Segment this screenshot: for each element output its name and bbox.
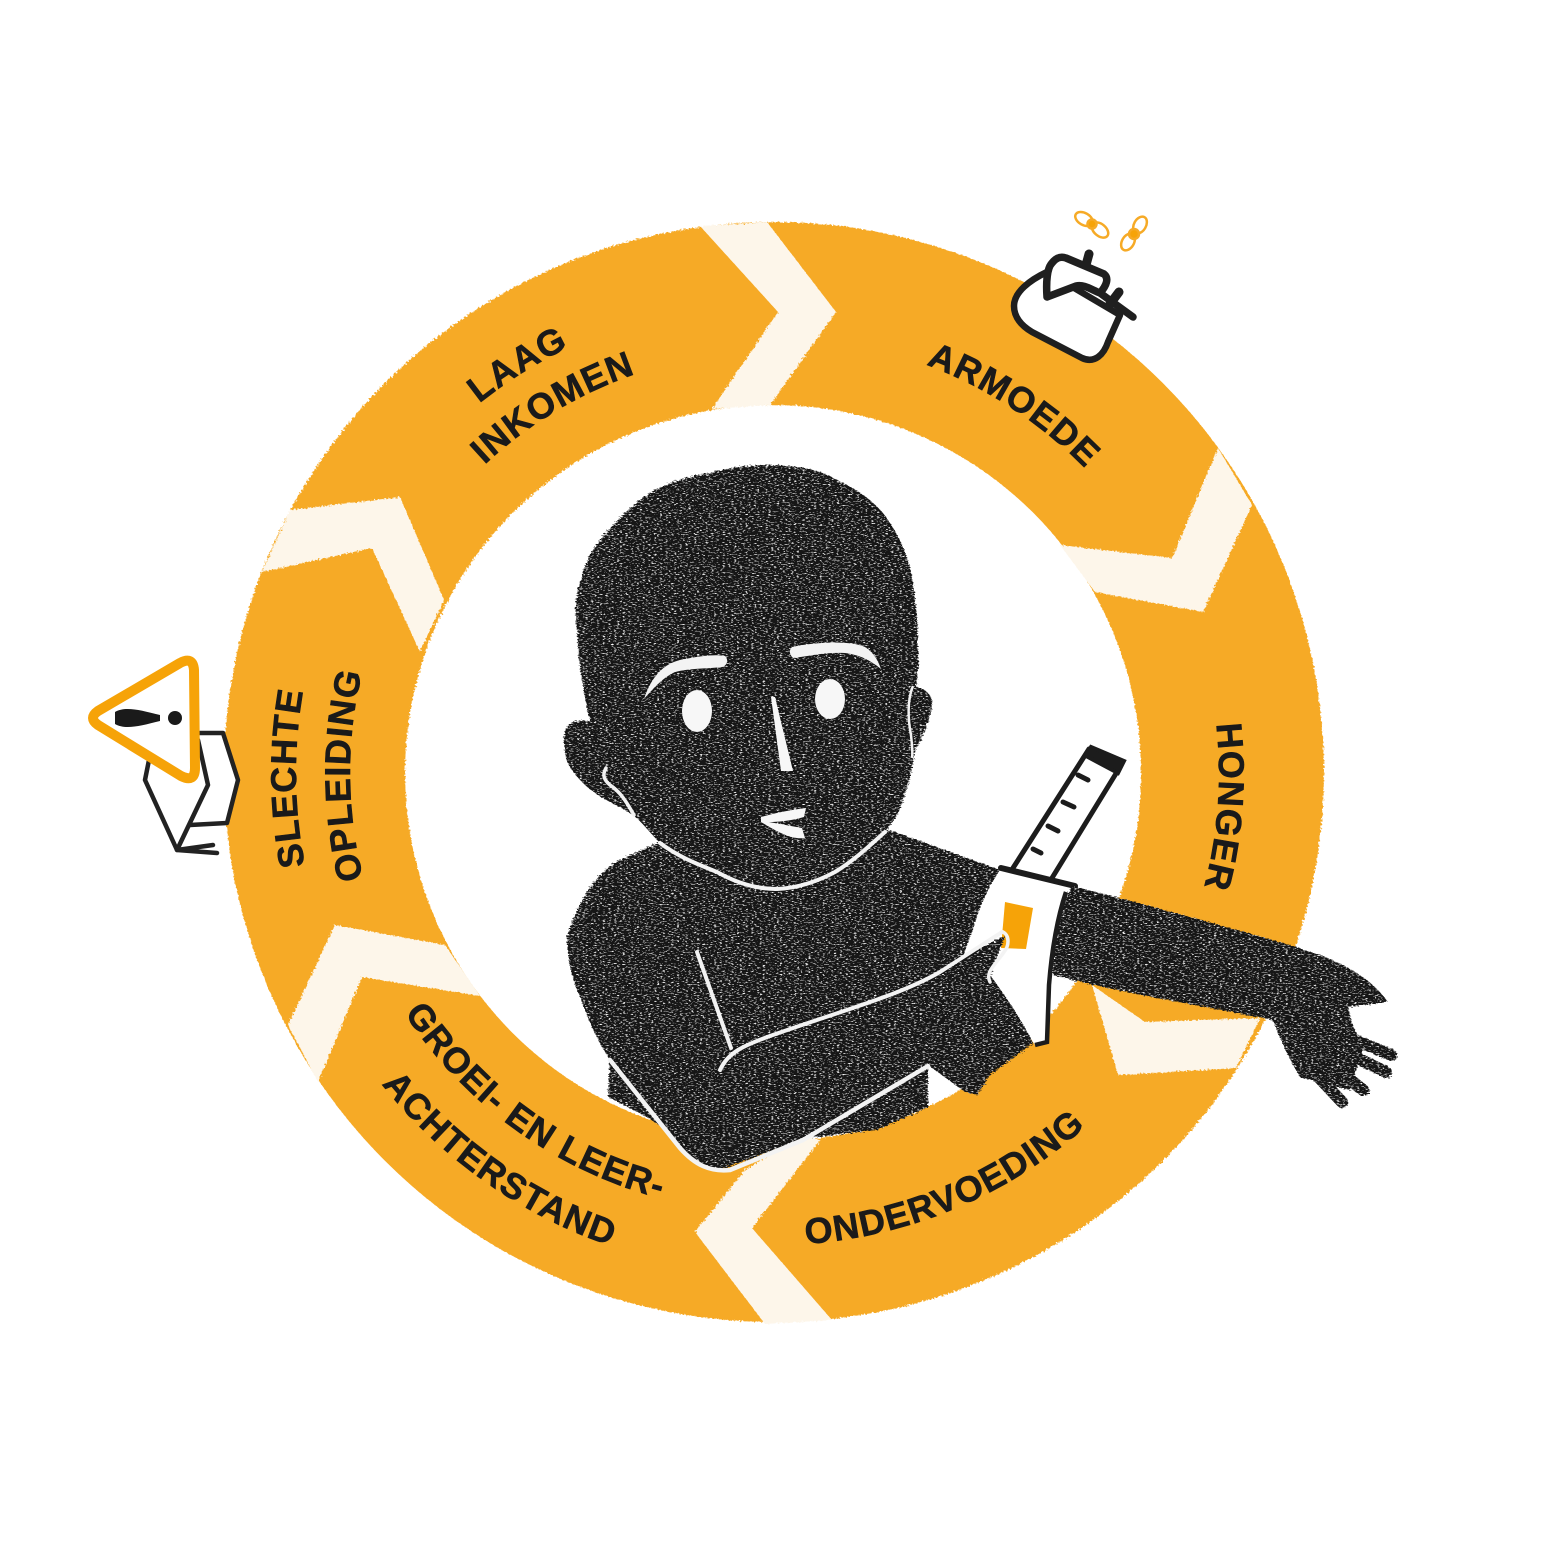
label: laag: LAAG	[466, 329, 565, 402]
warning triangle	[93, 661, 195, 778]
pot lid	[1047, 257, 1133, 317]
icon: graduation cap with warning sign	[93, 661, 238, 853]
label: ondervoeding: ONDERVOEDING	[806, 1112, 1082, 1244]
arrow gap: honger to ondervoeding	[1092, 985, 1260, 1075]
mouth	[761, 808, 806, 838]
label: honger: HONGER	[1204, 724, 1244, 890]
eyes	[682, 690, 712, 732]
label: opleiding: OPLEIDING	[324, 671, 362, 881]
ear line left	[604, 768, 634, 815]
outstretched arm with hand	[1053, 886, 1391, 1102]
label: slechte: SLECHTE	[270, 690, 304, 867]
arrow gap: armoede to honger	[1060, 448, 1252, 612]
pot body	[1014, 272, 1120, 360]
white wrap band	[963, 870, 1075, 1045]
white body lines	[610, 832, 1008, 1170]
fly left	[1073, 209, 1111, 241]
orange bracelet marker	[1001, 902, 1033, 949]
eyebrow left	[644, 655, 727, 699]
label: groei- en leer-: GROEI- EN LEER-	[408, 1004, 662, 1196]
arrow gap: slechte opleiding to laag inkomen	[262, 497, 444, 652]
arrow gap: ondervoeding to groei	[695, 1135, 832, 1324]
fly right	[1118, 214, 1150, 253]
label: inkomen: INKOMEN	[469, 351, 634, 464]
pointing hand and forearm	[630, 936, 1033, 1170]
label: achterstand: ACHTERSTAND	[382, 1076, 614, 1242]
child figure	[564, 465, 1391, 1170]
nose	[771, 697, 793, 771]
arrow gap: groei to slechte opleiding	[288, 925, 480, 1082]
pot knobs	[1086, 254, 1119, 304]
ear line right	[909, 686, 913, 758]
eyebrow right	[790, 642, 881, 669]
exclamation mark	[115, 709, 160, 727]
cuff line	[1035, 892, 1066, 1045]
arrow gap: laag inkomen to armoede	[700, 222, 836, 409]
label: armoede: ARMOEDE	[926, 345, 1102, 468]
cycle ring	[224, 222, 1324, 1324]
head with ears	[564, 465, 932, 890]
icon: cooking pot with flies	[1014, 209, 1150, 360]
torso	[567, 830, 1000, 1160]
measuring tape	[1001, 747, 1124, 886]
graduation cap	[145, 733, 238, 853]
